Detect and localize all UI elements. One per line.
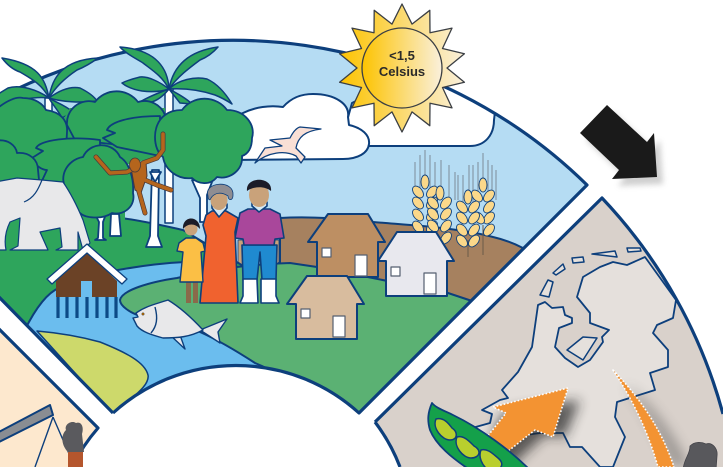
panel: cream sector with farmer xyxy=(0,325,98,467)
hand and arm xyxy=(62,422,84,467)
pea pod xyxy=(428,403,530,467)
canopy front xyxy=(63,145,133,218)
palm trees xyxy=(0,47,232,223)
panel: sustainable landscape sector xyxy=(0,30,615,430)
panel: Netherlands map sector xyxy=(375,198,723,467)
family: mother xyxy=(200,184,238,303)
house: brown xyxy=(308,214,385,277)
seagull xyxy=(255,127,321,163)
wheat xyxy=(410,150,497,257)
sector outline xyxy=(0,325,98,467)
canopy left xyxy=(0,98,67,160)
sector outline xyxy=(375,198,723,467)
map and arrows xyxy=(463,248,717,467)
canopy back xyxy=(67,91,165,150)
orangutan xyxy=(96,134,171,213)
tool beam xyxy=(0,405,53,444)
green backing xyxy=(0,108,165,232)
jungle trees xyxy=(0,91,253,247)
canopy far left xyxy=(0,140,39,182)
black arrow xyxy=(580,105,663,186)
elephant xyxy=(0,178,90,250)
landscape background xyxy=(0,42,585,411)
stilt house xyxy=(47,244,127,318)
sector background xyxy=(0,325,98,467)
trunks xyxy=(95,170,212,247)
house: tan xyxy=(287,276,364,339)
sector outline xyxy=(0,40,587,413)
sector background xyxy=(375,198,723,467)
family: child xyxy=(177,218,205,303)
family: father xyxy=(235,180,284,303)
canopy flat xyxy=(103,116,160,156)
house: light grey xyxy=(378,232,454,296)
sun badge: <1,5 xyxy=(389,48,415,63)
sun badge xyxy=(340,4,464,132)
ropes xyxy=(35,417,70,467)
fish xyxy=(133,300,227,349)
sun badge: Celsius xyxy=(379,64,425,79)
canopy big xyxy=(155,99,253,183)
canopy lower flat xyxy=(32,138,100,185)
